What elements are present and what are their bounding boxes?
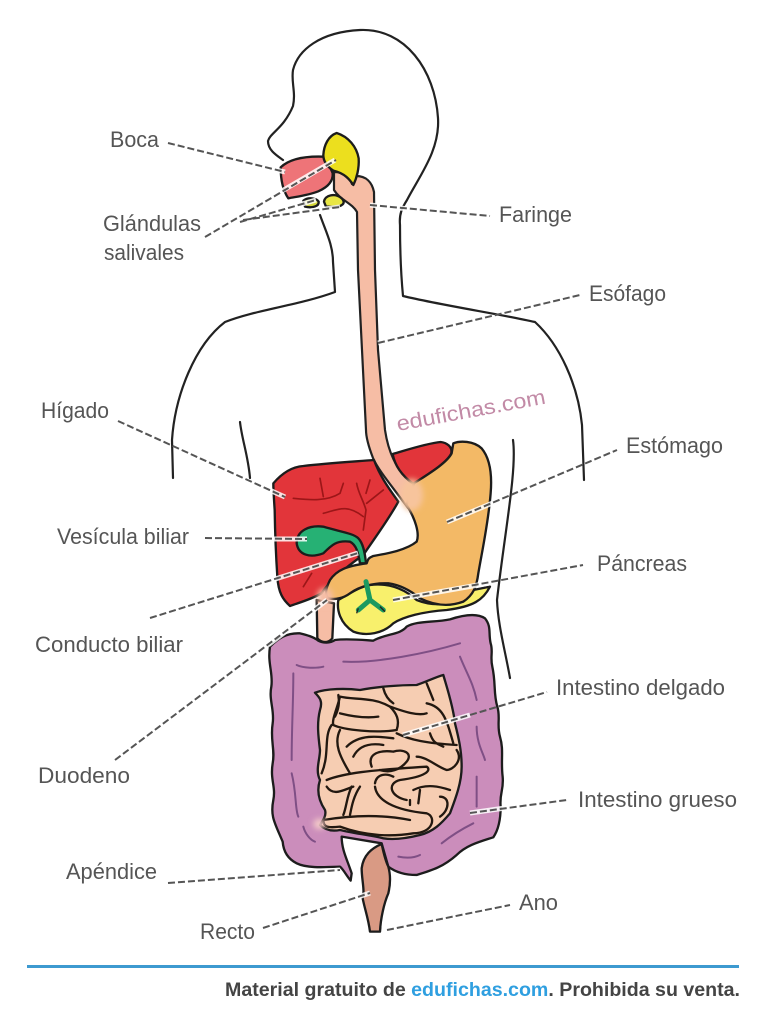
label: Apéndice: Apéndice xyxy=(66,859,157,884)
leader: Apéndice xyxy=(168,870,340,883)
leader: Intestino delgado xyxy=(403,692,547,735)
label: Conducto biliar: Conducto biliar xyxy=(35,632,183,657)
leader: Boca xyxy=(168,143,285,172)
label: Vesícula biliar: Vesícula biliar xyxy=(57,524,189,549)
organ: small intestine xyxy=(313,675,462,839)
label: Glándulas salivales: salivales xyxy=(104,240,184,265)
label: Intestino grueso: Intestino grueso xyxy=(578,787,737,812)
organ: stomach and duodenum xyxy=(317,442,491,642)
leader: Duodeno xyxy=(115,600,327,760)
label: Recto: Recto xyxy=(200,919,255,944)
intestine loops xyxy=(322,683,459,835)
colon fold lines xyxy=(292,643,485,858)
organ: salivary glands xyxy=(303,133,359,207)
label: Boca: Boca xyxy=(110,127,160,152)
leader: Recto xyxy=(263,893,370,928)
label: Glándulas salivales: Glándulas xyxy=(103,211,201,236)
leader: Intestino grueso xyxy=(470,800,567,813)
footer rule xyxy=(27,965,739,968)
leader: Glándulas salivales middle xyxy=(240,200,316,222)
leader: Esófago xyxy=(378,295,580,343)
footer text: Material gratuito de edufichas.com. Prohibida su venta. xyxy=(225,980,740,1001)
leader: Estómago xyxy=(447,450,617,522)
organ: pancreas xyxy=(338,584,490,634)
organ: liver xyxy=(273,442,452,606)
label: Hígado: Hígado xyxy=(41,398,109,423)
organ: large intestine xyxy=(269,615,503,881)
label: Páncreas: Páncreas xyxy=(597,551,687,576)
leader: Glándulas salivales lower xyxy=(243,207,340,220)
watermark: edufichas.com xyxy=(395,386,547,436)
liver veins xyxy=(293,478,383,587)
leader: Conducto biliar xyxy=(150,553,358,618)
leader: Páncreas xyxy=(393,565,583,600)
leader: Glándulas salivales upper xyxy=(205,160,336,237)
body outline xyxy=(172,30,584,678)
leader: Faringe xyxy=(370,205,490,216)
label: Faringe: Faringe xyxy=(499,202,572,227)
organ: gallbladder and bile duct xyxy=(297,526,385,613)
label: Esófago: Esófago xyxy=(589,281,666,306)
leader lines xyxy=(115,143,617,930)
label: Glándulas salivales xyxy=(103,211,201,265)
organ: mouth xyxy=(281,157,333,198)
leader: Hígado xyxy=(118,421,285,497)
label: Ano: Ano xyxy=(519,890,558,915)
label: Intestino delgado: Intestino delgado xyxy=(556,675,725,700)
label: Duodeno: Duodeno xyxy=(38,763,130,788)
label: Estómago: Estómago xyxy=(626,433,723,458)
organ: pharynx and esophagus xyxy=(334,172,430,510)
leader: Vesícula biliar xyxy=(205,538,307,539)
leader: Ano xyxy=(387,905,510,930)
organ: rectum and anus xyxy=(362,844,390,932)
